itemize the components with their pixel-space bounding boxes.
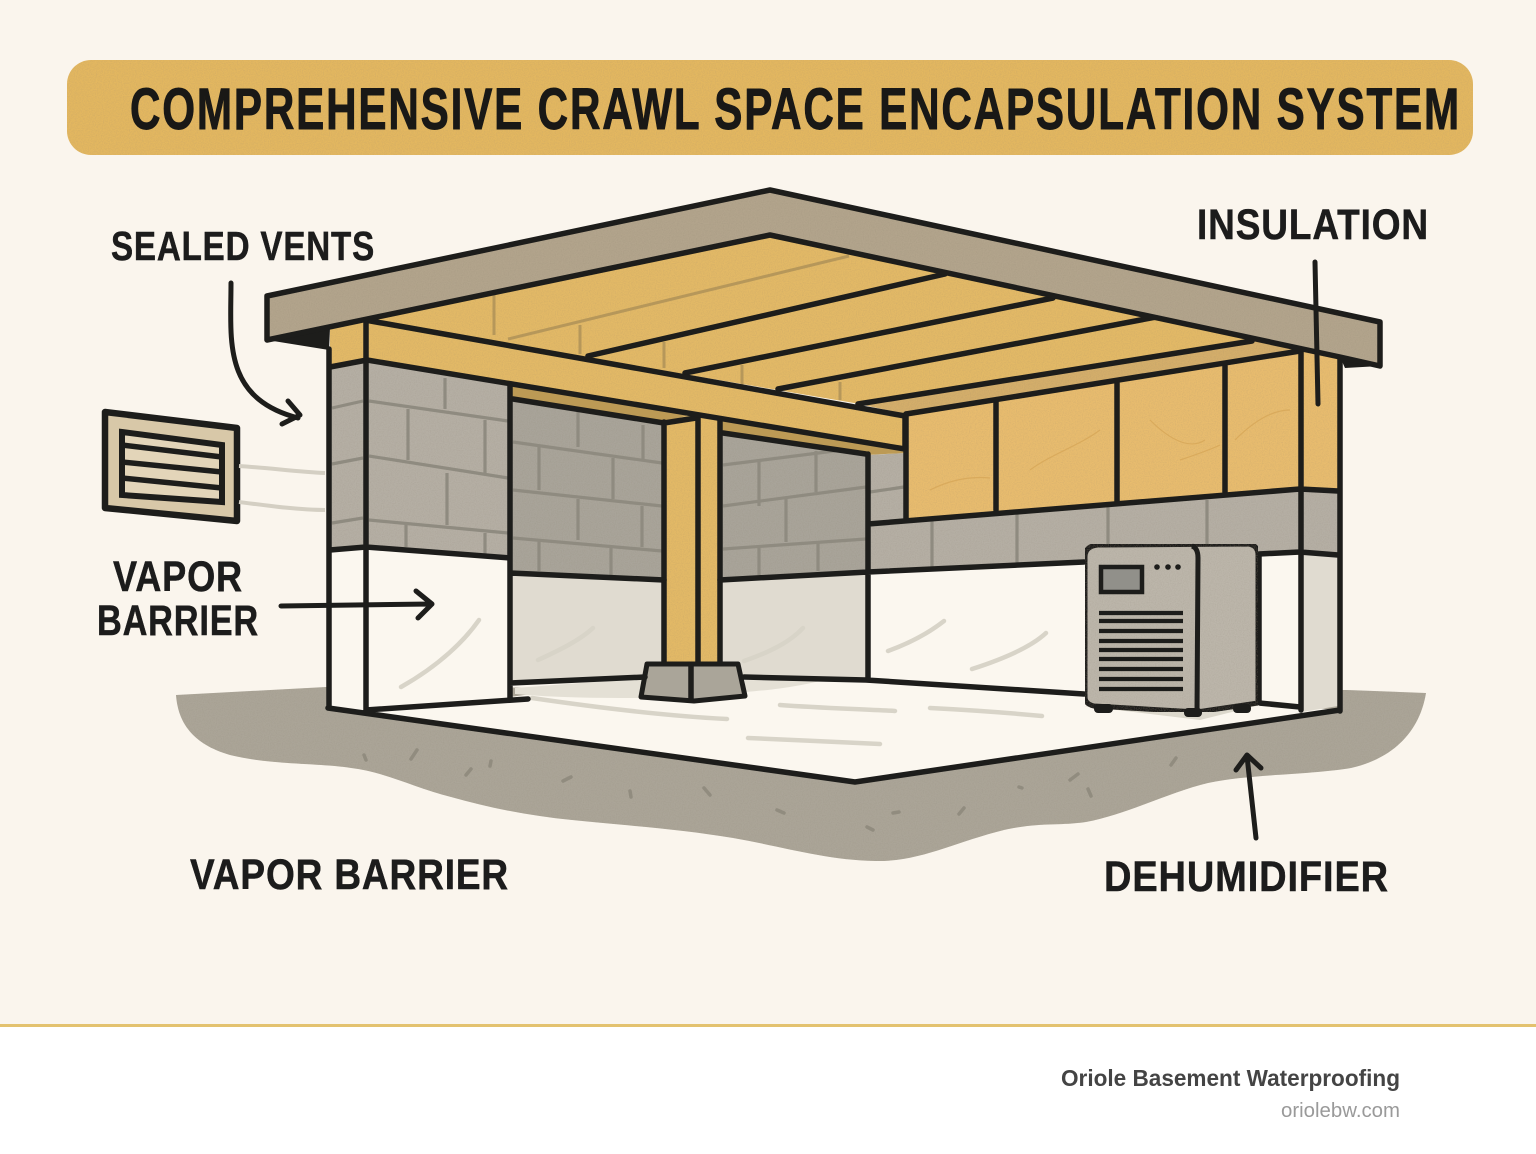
label: vapor barrier wall xyxy=(97,553,259,645)
feet xyxy=(1094,704,1251,717)
label: dehumidifier: DEHUMIDIFIER xyxy=(1104,853,1389,901)
crawl space structure xyxy=(267,190,1380,782)
post footing xyxy=(641,664,745,701)
arrow: sealed vents xyxy=(231,283,300,424)
under-beam shadow wedges xyxy=(511,382,906,455)
footer website: oriolebw.com xyxy=(1281,1100,1400,1122)
support post xyxy=(664,412,720,664)
right wall: small block section xyxy=(868,453,906,524)
unit body xyxy=(1085,544,1258,712)
right wall: vapor barrier xyxy=(868,552,1338,712)
arrow: dehumidifier xyxy=(1236,755,1261,838)
ceiling joists xyxy=(365,236,1300,414)
arrow: insulation xyxy=(1315,262,1318,404)
label: vapor barrier floor: VAPOR BARRIER xyxy=(190,851,509,899)
back wall: middle block section xyxy=(720,425,868,680)
floor: vapor barrier xyxy=(328,678,1340,782)
dehumidifier xyxy=(1084,544,1260,720)
back wall: left block section xyxy=(510,388,664,683)
louvers xyxy=(1099,613,1183,689)
display xyxy=(1101,567,1142,592)
icon: wall vent xyxy=(105,412,325,521)
side panel edge xyxy=(1192,546,1198,712)
label: vapor barrier wall: VAPOR xyxy=(113,553,243,601)
roof overhang xyxy=(267,190,1380,368)
footer company name: Oriole Basement Waterproofing xyxy=(1061,1065,1400,1091)
right wall: insulation panels xyxy=(905,351,1338,519)
wall outlines xyxy=(328,320,1340,782)
title banner xyxy=(67,60,1473,155)
main beam xyxy=(330,320,905,449)
floor shadow xyxy=(1084,705,1260,720)
right wall: block strip xyxy=(868,487,1338,573)
footer xyxy=(0,1024,1536,1154)
label: vapor barrier wall: BARRIER xyxy=(97,597,259,645)
label: insulation: INSULATION xyxy=(1197,201,1429,249)
label: sealed vents: SEALED VENTS xyxy=(111,223,375,269)
ground xyxy=(176,687,1426,861)
indicator lights xyxy=(1154,564,1181,570)
arrow: vapor barrier xyxy=(281,591,432,618)
front-left wall: blocks and vapor barrier xyxy=(330,358,510,710)
